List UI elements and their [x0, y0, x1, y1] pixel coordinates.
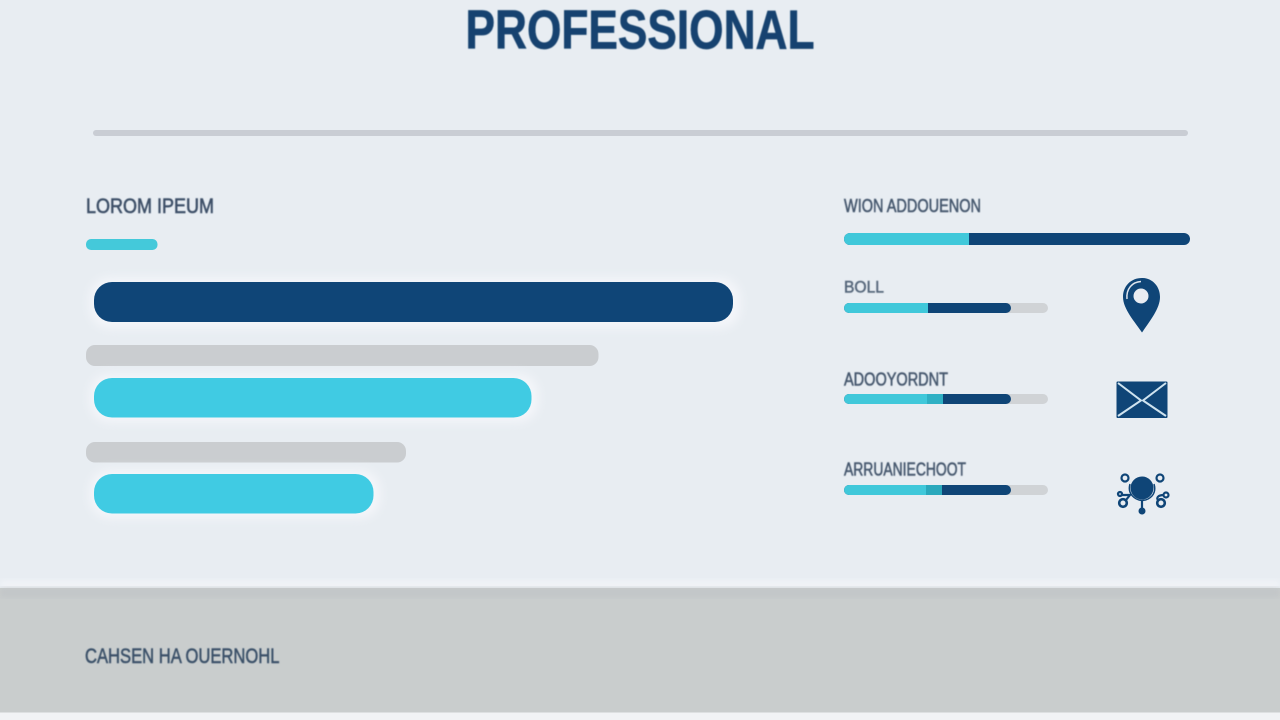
bar: cyan long	[90, 374, 538, 422]
bar: cyan short	[90, 470, 380, 518]
panel: right metrics	[844, 196, 1190, 495]
icon: envelope	[1116, 382, 1168, 418]
bar: navy	[90, 278, 740, 328]
metric main bar	[844, 233, 1190, 245]
title: PROFESSIONAL	[466, 0, 814, 60]
bar: gray two	[86, 442, 406, 462]
heading: lorem ipsum: LOROM IPEUM	[86, 195, 214, 218]
metric: second row	[844, 370, 1048, 404]
footer text: CAHSEN HA OUERNOHL	[85, 645, 280, 668]
heading accent bar	[86, 239, 158, 250]
metric: third row	[844, 460, 1048, 495]
metric heading: WION ADDOUENON	[844, 196, 981, 216]
metric: second row: ADOOYORDNT	[844, 370, 948, 390]
metric: third row: ARRUANIECHOOT	[844, 460, 966, 480]
panel: footer band	[0, 580, 1280, 720]
bar: gray one	[86, 345, 598, 366]
panel: left bar chart	[86, 195, 740, 518]
metric: boll: BOLL	[844, 278, 884, 296]
metric: boll	[844, 278, 1048, 313]
icon: location pin	[1123, 278, 1160, 332]
icon: network	[1118, 474, 1168, 514]
